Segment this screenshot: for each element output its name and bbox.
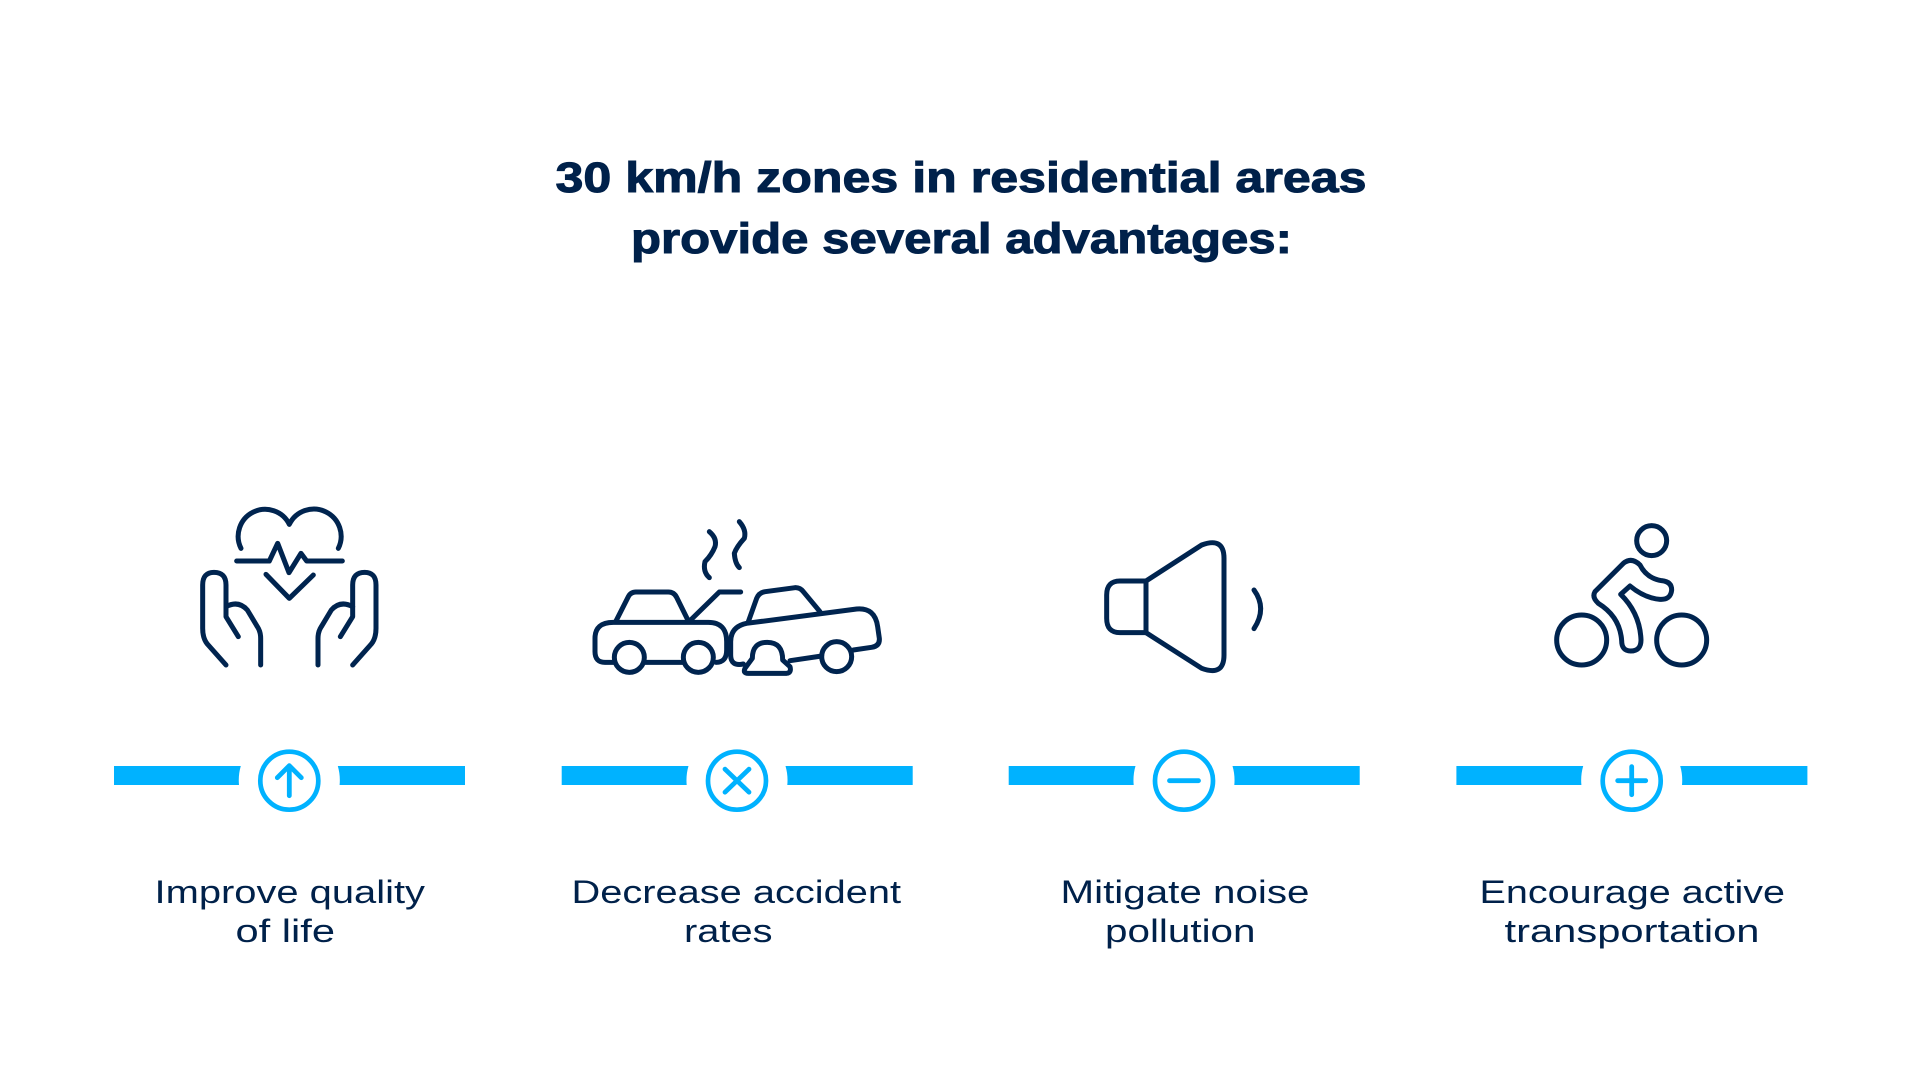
divider with minus badge — [1009, 752, 1360, 810]
divider with arrow up badge — [114, 752, 465, 810]
label: encourage active transportation: transportation — [1504, 913, 1760, 949]
panel: mitigate noise pollution — [1009, 543, 1360, 949]
label: mitigate noise pollution: Mitigate noise — [1060, 874, 1310, 910]
icon: hands holding heart — [203, 509, 376, 665]
label: improve quality of life: Improve quality — [154, 874, 425, 910]
panel: improve quality of life — [114, 509, 465, 949]
title: 30 km/h zones in residential areas — [556, 154, 1366, 202]
label: improve quality of life — [154, 874, 425, 949]
label: mitigate noise pollution: pollution — [1105, 913, 1256, 949]
icon: car crash — [595, 522, 879, 673]
label: mitigate noise pollution — [1060, 874, 1310, 949]
label: decrease accident rates: Decrease accident — [572, 874, 901, 910]
label: decrease accident rates: rates — [684, 913, 772, 949]
label: encourage active transportation: Encourage active — [1480, 874, 1785, 910]
divider with cross badge — [562, 752, 913, 810]
icon: speaker — [1107, 543, 1261, 671]
icon: cyclist — [1557, 526, 1707, 665]
label: decrease accident rates — [572, 874, 901, 949]
divider with plus badge — [1456, 752, 1807, 810]
title — [556, 154, 1366, 263]
label: encourage active transportation — [1480, 874, 1785, 949]
panel: encourage active transportation — [1456, 526, 1807, 949]
label: improve quality of life: of life — [236, 913, 335, 949]
panel: decrease accident rates — [562, 522, 913, 949]
title: provide several advantages: — [631, 215, 1292, 263]
